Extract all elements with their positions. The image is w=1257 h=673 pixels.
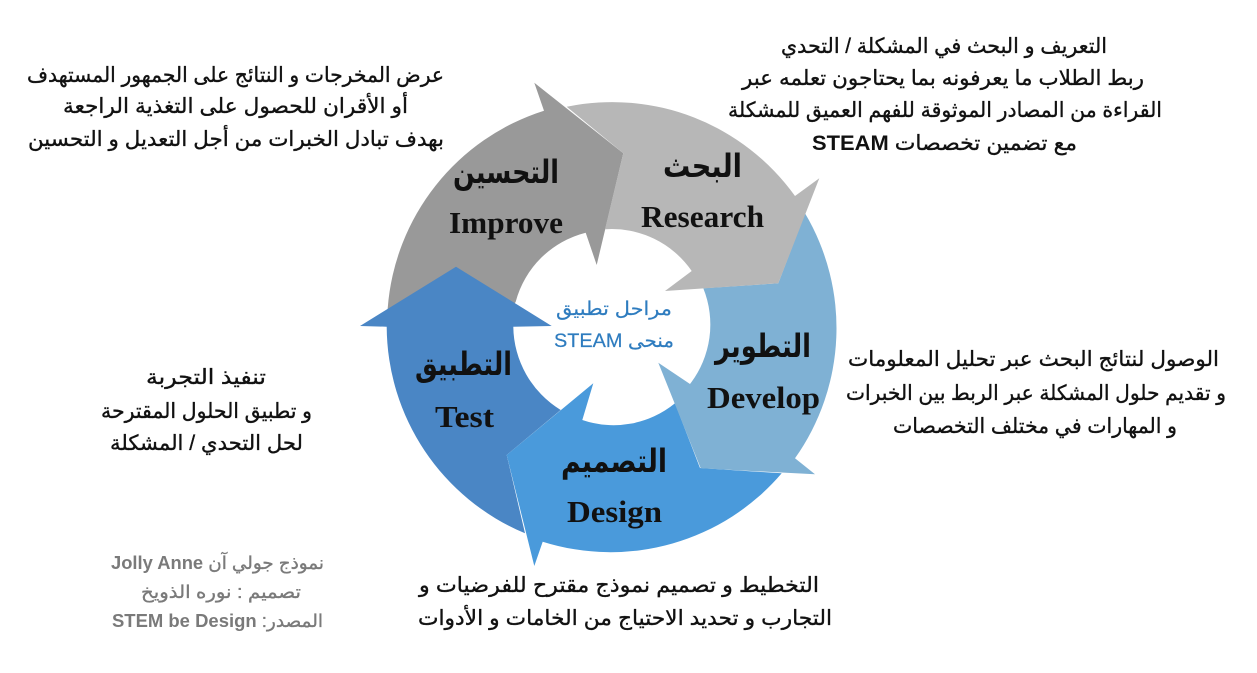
text block: improve description: بهدف تبادل الخبرات من أجل التعديل و التحسين <box>28 125 444 151</box>
label: research <box>641 147 764 234</box>
center title: منحى STEAM <box>554 331 674 352</box>
credits: نموذج جولي آن Jolly Anne <box>111 551 324 574</box>
label: develop: التطوير <box>713 327 811 365</box>
credits: تصميم : نوره الذويخ <box>141 582 301 603</box>
arrow: research <box>567 102 819 291</box>
text block: develop description: و المهارات في مختلف التخصصات <box>893 415 1177 438</box>
text block: improve description: عرض المخرجات و النتائج على الجمهور المستهدف <box>27 64 444 87</box>
credits <box>111 551 324 631</box>
text block: research description: ربط الطلاب ما يعرفونه بما يحتاجون تعلمه عبر <box>741 67 1144 90</box>
text block: research description: القراءة من المصادر الموثوقة للفهم العميق للمشكلة <box>728 99 1162 123</box>
text block: improve description <box>27 64 444 151</box>
center title <box>554 299 674 352</box>
label: improve: Improve <box>449 205 563 240</box>
label: research: البحث <box>663 147 742 185</box>
label: test: التطبيق <box>415 345 512 383</box>
label: test: Test <box>435 399 495 434</box>
label: improve: التحسين <box>453 153 559 191</box>
label: design <box>561 442 667 529</box>
arrow: design <box>507 383 782 566</box>
text block: design description: التخطيط و تصميم نموذج مقترح للفرضيات و <box>418 574 819 598</box>
arrow: test <box>360 267 561 533</box>
text block: improve description: أو الأقران للحصول على التغذية الراجعة <box>63 92 408 118</box>
text block: test description: و تطبيق الحلول المقترحة <box>101 400 312 423</box>
cycle diagram <box>360 83 836 566</box>
text block: develop description <box>846 348 1226 438</box>
label: improve <box>449 153 563 240</box>
text block: research description <box>728 35 1162 155</box>
text block: design description <box>418 574 832 631</box>
label: develop: Develop <box>707 380 820 415</box>
label: develop <box>707 327 820 415</box>
text block: test description <box>101 366 312 455</box>
label: test <box>415 345 512 434</box>
arrow: improve <box>387 83 623 330</box>
text block: research description: مع تضمين تخصصات STEAM <box>812 132 1077 155</box>
text block: test description: لحل التحدي / المشكلة <box>110 432 303 455</box>
text block: research description: التعريف و البحث في المشكلة / التحدي <box>781 35 1107 58</box>
arrow: develop <box>658 213 836 474</box>
text block: test description: تنفيذ التجربة <box>146 366 266 389</box>
label: design: Design <box>567 494 662 529</box>
text block: develop description: و تقديم حلول المشكلة عبر الربط بين الخبرات <box>846 382 1226 406</box>
label: design: التصميم <box>561 442 667 480</box>
label: research: Research <box>641 199 764 234</box>
center title: مراحل تطبيق <box>556 299 672 320</box>
text block: develop description: الوصول لنتائج البحث عبر تحليل المعلومات <box>848 348 1219 371</box>
text block: design description: التجارب و تحديد الاحتياج من الخامات و الأدوات <box>418 605 832 631</box>
credits: المصدر: STEM be Design <box>112 611 323 631</box>
